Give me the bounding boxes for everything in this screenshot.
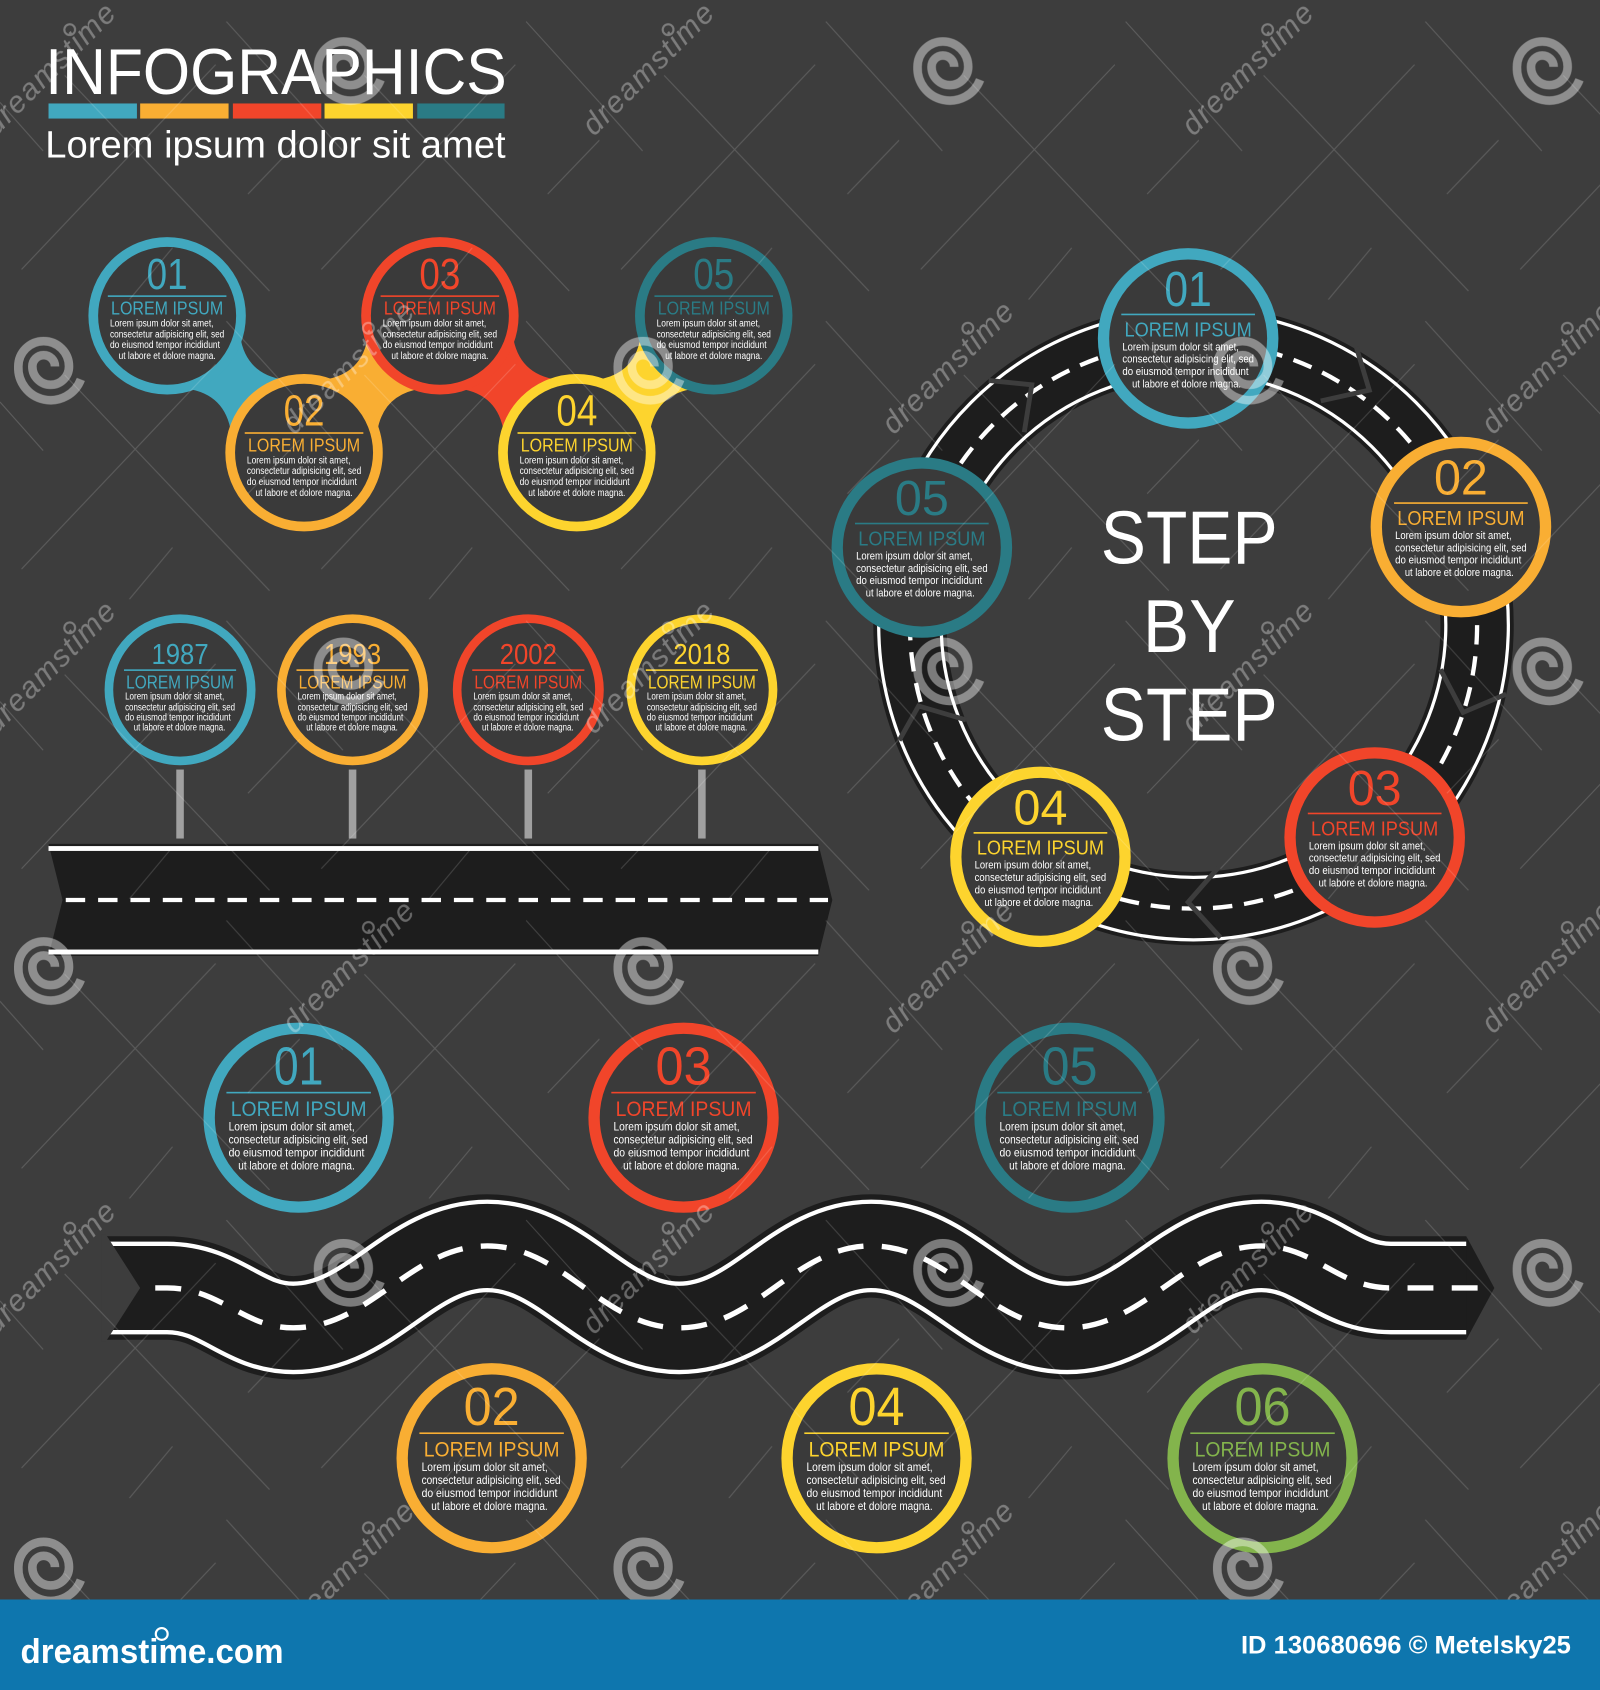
sign 2002 — [457, 619, 599, 761]
step 03: ut labore et dolore magna. — [623, 1158, 740, 1172]
sign 1993: LOREM IPSUM — [299, 672, 406, 693]
sign 2002: consectetur adipisicing elit, sed — [473, 702, 583, 713]
step 04: consectetur adipisicing elit, sed — [806, 1473, 946, 1487]
ring step 05 — [837, 463, 1006, 632]
circle 05: LOREM IPSUM — [658, 298, 770, 319]
step 03 — [594, 1028, 773, 1207]
ring step 03 — [1290, 753, 1459, 922]
sign 1993: do eiusmod tempor incididunt — [298, 713, 403, 724]
step 03: 03 — [656, 1036, 712, 1096]
circle 05: Lorem ipsum dolor sit amet, — [657, 319, 760, 330]
ring step 03: LOREM IPSUM — [1311, 817, 1438, 840]
step 04: 04 — [849, 1377, 905, 1437]
sign 1993: 1993 — [324, 639, 381, 671]
subtitle: Lorem ipsum dolor sit amet — [45, 123, 506, 165]
step 04: ut labore et dolore magna. — [816, 1499, 933, 1513]
step 05: Lorem ipsum dolor sit amet, — [999, 1120, 1126, 1134]
step 01: consectetur adipisicing elit, sed — [229, 1133, 368, 1147]
sign 2018: consectetur adipisicing elit, sed — [647, 702, 757, 713]
circle 03: ut labore et dolore magna. — [391, 351, 488, 362]
circle 02: 02 — [284, 388, 325, 436]
ring step 05: 05 — [895, 470, 949, 526]
step 06: ut labore et dolore magna. — [1202, 1499, 1319, 1513]
step 02: do eiusmod tempor incididunt — [422, 1486, 558, 1500]
circle 02: LOREM IPSUM — [248, 435, 360, 456]
title: INFOGRAPHICS — [45, 35, 507, 108]
panel: timeline on straight road — [49, 619, 832, 956]
sign 2002: ut labore et dolore magna. — [482, 723, 574, 734]
winding road — [101, 1234, 1494, 1342]
step 02: 02 — [464, 1377, 520, 1437]
ring step 02: 02 — [1434, 450, 1488, 506]
watermark text: dreamstime — [276, 295, 421, 441]
ring step 04: ut labore et dolore magna. — [984, 897, 1093, 909]
sign 2002: Lorem ipsum dolor sit amet, — [473, 691, 573, 702]
watermark text: dreamstime — [576, 1195, 721, 1341]
circle 01: Lorem ipsum dolor sit amet, — [110, 319, 213, 330]
ring step 02: LOREM IPSUM — [1397, 507, 1525, 530]
circle 05: ut labore et dolore magna. — [665, 351, 762, 362]
circle 01 — [93, 242, 241, 390]
panel: linked circles chain — [93, 242, 788, 527]
circle 04: do eiusmod tempor incididunt — [520, 477, 630, 488]
ring step 02: do eiusmod tempor incididunt — [1395, 555, 1522, 567]
ring step 01 — [1104, 254, 1273, 423]
step 05: LOREM IPSUM — [1002, 1096, 1137, 1121]
circle 02 — [230, 379, 378, 527]
sign 2018: ut labore et dolore magna. — [656, 723, 747, 734]
circle 03: LOREM IPSUM — [384, 298, 496, 319]
circle 05: consectetur adipisicing elit, sed — [657, 329, 771, 340]
step 01: 01 — [274, 1036, 323, 1096]
ring step 03: ut labore et dolore magna. — [1319, 877, 1427, 889]
step 04 — [787, 1369, 966, 1548]
step 06: Lorem ipsum dolor sit amet, — [1192, 1460, 1319, 1474]
ring step 01: ut labore et dolore magna. — [1132, 378, 1241, 390]
ring step 02 — [1376, 442, 1546, 612]
ring step 04: consectetur adipisicing elit, sed — [975, 872, 1106, 884]
step 05: ut labore et dolore magna. — [1009, 1158, 1126, 1172]
footer bar — [0, 1599, 1600, 1690]
sign 2018: Lorem ipsum dolor sit amet, — [647, 691, 746, 702]
ring step 01: Lorem ipsum dolor sit amet, — [1122, 341, 1239, 353]
ring step 04 — [956, 772, 1125, 941]
circle 03: consectetur adipisicing elit, sed — [383, 329, 497, 340]
step 05: 05 — [1042, 1036, 1098, 1096]
sign 2018: 2018 — [673, 639, 730, 671]
step 05 — [980, 1028, 1159, 1207]
ring road — [879, 310, 1508, 940]
circle 01: ut labore et dolore magna. — [119, 351, 216, 362]
sign 2002: do eiusmod tempor incididunt — [473, 713, 579, 724]
sign 2018: do eiusmod tempor incididunt — [647, 713, 753, 724]
ring step 04: LOREM IPSUM — [977, 837, 1104, 860]
ring step 03: Lorem ipsum dolor sit amet, — [1309, 840, 1425, 852]
circle 05: do eiusmod tempor incididunt — [657, 340, 767, 351]
ring step 01: 01 — [1164, 261, 1212, 317]
step 03: consectetur adipisicing elit, sed — [613, 1133, 753, 1147]
ring step 01: do eiusmod tempor incididunt — [1122, 366, 1249, 378]
ring step 04: Lorem ipsum dolor sit amet, — [975, 860, 1091, 872]
watermark text: dreamstime — [1175, 0, 1321, 142]
center text: step by step: STEP — [1101, 672, 1278, 756]
circle 04: 04 — [556, 388, 597, 436]
watermark text: dreamstime — [876, 895, 1021, 1040]
step 01: LOREM IPSUM — [231, 1096, 367, 1121]
ring step 05: do eiusmod tempor incididunt — [856, 575, 983, 587]
center text: step by step: STEP — [1101, 496, 1278, 580]
sign 1987: ut labore et dolore magna. — [134, 723, 225, 734]
ring step 04: 04 — [1013, 780, 1067, 836]
sign 2018 — [631, 619, 773, 761]
circle 05 — [640, 242, 788, 390]
circle 02: consectetur adipisicing elit, sed — [247, 466, 361, 477]
straight road — [49, 844, 832, 956]
step 05: consectetur adipisicing elit, sed — [999, 1133, 1139, 1147]
circle 02: do eiusmod tempor incididunt — [247, 477, 357, 488]
circle 03 — [366, 242, 514, 390]
ring step 03: do eiusmod tempor incididunt — [1309, 865, 1436, 877]
circle 02: Lorem ipsum dolor sit amet, — [247, 455, 350, 466]
watermark text: dreamstime — [276, 1495, 421, 1640]
step 03: do eiusmod tempor incididunt — [613, 1145, 750, 1159]
circle 04: LOREM IPSUM — [521, 435, 633, 456]
step 03: LOREM IPSUM — [616, 1096, 751, 1121]
step 04: Lorem ipsum dolor sit amet, — [806, 1460, 933, 1474]
circle 01: do eiusmod tempor incididunt — [110, 340, 220, 351]
circle 01: LOREM IPSUM — [111, 298, 223, 319]
step 06: consectetur adipisicing elit, sed — [1192, 1473, 1332, 1487]
image id: ID 130680696 © Metelsky25 — [1241, 1632, 1571, 1659]
center text: step by step: BY — [1143, 584, 1236, 668]
sign 1987: consectetur adipisicing elit, sed — [125, 702, 235, 713]
step 02: LOREM IPSUM — [424, 1437, 560, 1462]
connector 02 to 03 — [324, 335, 421, 433]
step 02: ut labore et dolore magna. — [431, 1499, 548, 1513]
sign 1993 — [281, 619, 424, 761]
colour bars — [49, 103, 505, 119]
watermark text: dreamstime — [576, 0, 721, 142]
ring step 05: consectetur adipisicing elit, sed — [856, 563, 988, 575]
sign 1993: consectetur adipisicing elit, sed — [298, 702, 408, 713]
ring step 02: ut labore et dolore magna. — [1405, 567, 1514, 579]
ring step 04: do eiusmod tempor incididunt — [975, 885, 1102, 897]
step 06: LOREM IPSUM — [1195, 1437, 1330, 1462]
step 06 — [1173, 1369, 1352, 1548]
sign 1987: 1987 — [151, 639, 209, 671]
sign 1987 — [109, 619, 251, 761]
circle 01: 01 — [147, 251, 188, 299]
connector 03 to 04 — [459, 335, 557, 433]
connector 01 to 02 — [187, 335, 285, 433]
watermark text: dreamstime — [1175, 595, 1321, 740]
circle 03: do eiusmod tempor incididunt — [383, 340, 493, 351]
step 02 — [402, 1369, 581, 1548]
step 06: do eiusmod tempor incididunt — [1192, 1486, 1329, 1500]
ring step 02: Lorem ipsum dolor sit amet, — [1395, 530, 1512, 542]
circle 04: Lorem ipsum dolor sit amet, — [520, 455, 623, 466]
panel: step by step ring road — [837, 254, 1546, 941]
step 03: Lorem ipsum dolor sit amet, — [613, 1120, 740, 1134]
sign 1987: do eiusmod tempor incididunt — [125, 713, 231, 724]
watermark text: dreamstime — [576, 595, 721, 740]
circle 04: ut labore et dolore magna. — [528, 488, 625, 499]
watermark text: dreamstime — [876, 295, 1021, 441]
step 01: Lorem ipsum dolor sit amet, — [229, 1120, 355, 1134]
ring step 01: consectetur adipisicing elit, sed — [1122, 354, 1254, 366]
ring step 05: Lorem ipsum dolor sit amet, — [856, 550, 973, 562]
circle 05: 05 — [693, 251, 734, 299]
title block — [45, 35, 507, 165]
circle 03: Lorem ipsum dolor sit amet, — [383, 319, 486, 330]
circle 01: consectetur adipisicing elit, sed — [110, 329, 224, 340]
watermark text: dreamstime — [876, 1495, 1021, 1640]
step 04: do eiusmod tempor incididunt — [806, 1486, 943, 1500]
sign 2002: 2002 — [500, 639, 557, 671]
road joint chevrons — [899, 347, 1506, 938]
step 05: do eiusmod tempor incididunt — [999, 1145, 1136, 1159]
ring step 05: ut labore et dolore magna. — [866, 588, 975, 600]
sign poles — [176, 770, 706, 839]
sign 1993: ut labore et dolore magna. — [306, 723, 398, 734]
center text: step by step — [1101, 496, 1278, 756]
road notch and arrow tip — [101, 1234, 1494, 1342]
step 01: do eiusmod tempor incididunt — [229, 1145, 365, 1159]
circle 04: consectetur adipisicing elit, sed — [520, 466, 634, 477]
circle 03: 03 — [419, 251, 460, 299]
sign 1987: LOREM IPSUM — [126, 672, 234, 693]
circle 02: ut labore et dolore magna. — [256, 488, 353, 499]
circle 04 — [503, 379, 651, 527]
ring step 05: LOREM IPSUM — [858, 527, 985, 550]
icon: logo swirl — [156, 1628, 168, 1640]
step 02: consectetur adipisicing elit, sed — [422, 1473, 561, 1487]
step 01 — [209, 1028, 388, 1207]
ring step 03: 03 — [1348, 760, 1402, 816]
ring step 03: consectetur adipisicing elit, sed — [1309, 853, 1440, 865]
sign 1993: Lorem ipsum dolor sit amet, — [298, 691, 397, 702]
sign 2018: LOREM IPSUM — [648, 672, 756, 693]
ring step 02: consectetur adipisicing elit, sed — [1395, 542, 1527, 554]
watermark text: dreamstime — [1175, 1195, 1321, 1341]
sign 1987: Lorem ipsum dolor sit amet, — [125, 691, 224, 702]
sign 2002: LOREM IPSUM — [474, 672, 582, 693]
step 01: ut labore et dolore magna. — [238, 1158, 355, 1172]
step 04: LOREM IPSUM — [809, 1437, 944, 1462]
watermark text: dreamstime — [276, 895, 421, 1040]
footer logo: dreamstime.com — [20, 1633, 284, 1671]
step 02: Lorem ipsum dolor sit amet, — [422, 1460, 548, 1474]
panel: winding road with six steps — [101, 1028, 1494, 1548]
step 06: 06 — [1235, 1377, 1291, 1437]
ring step 01: LOREM IPSUM — [1125, 318, 1252, 341]
connector 04 to 05 — [596, 335, 694, 433]
